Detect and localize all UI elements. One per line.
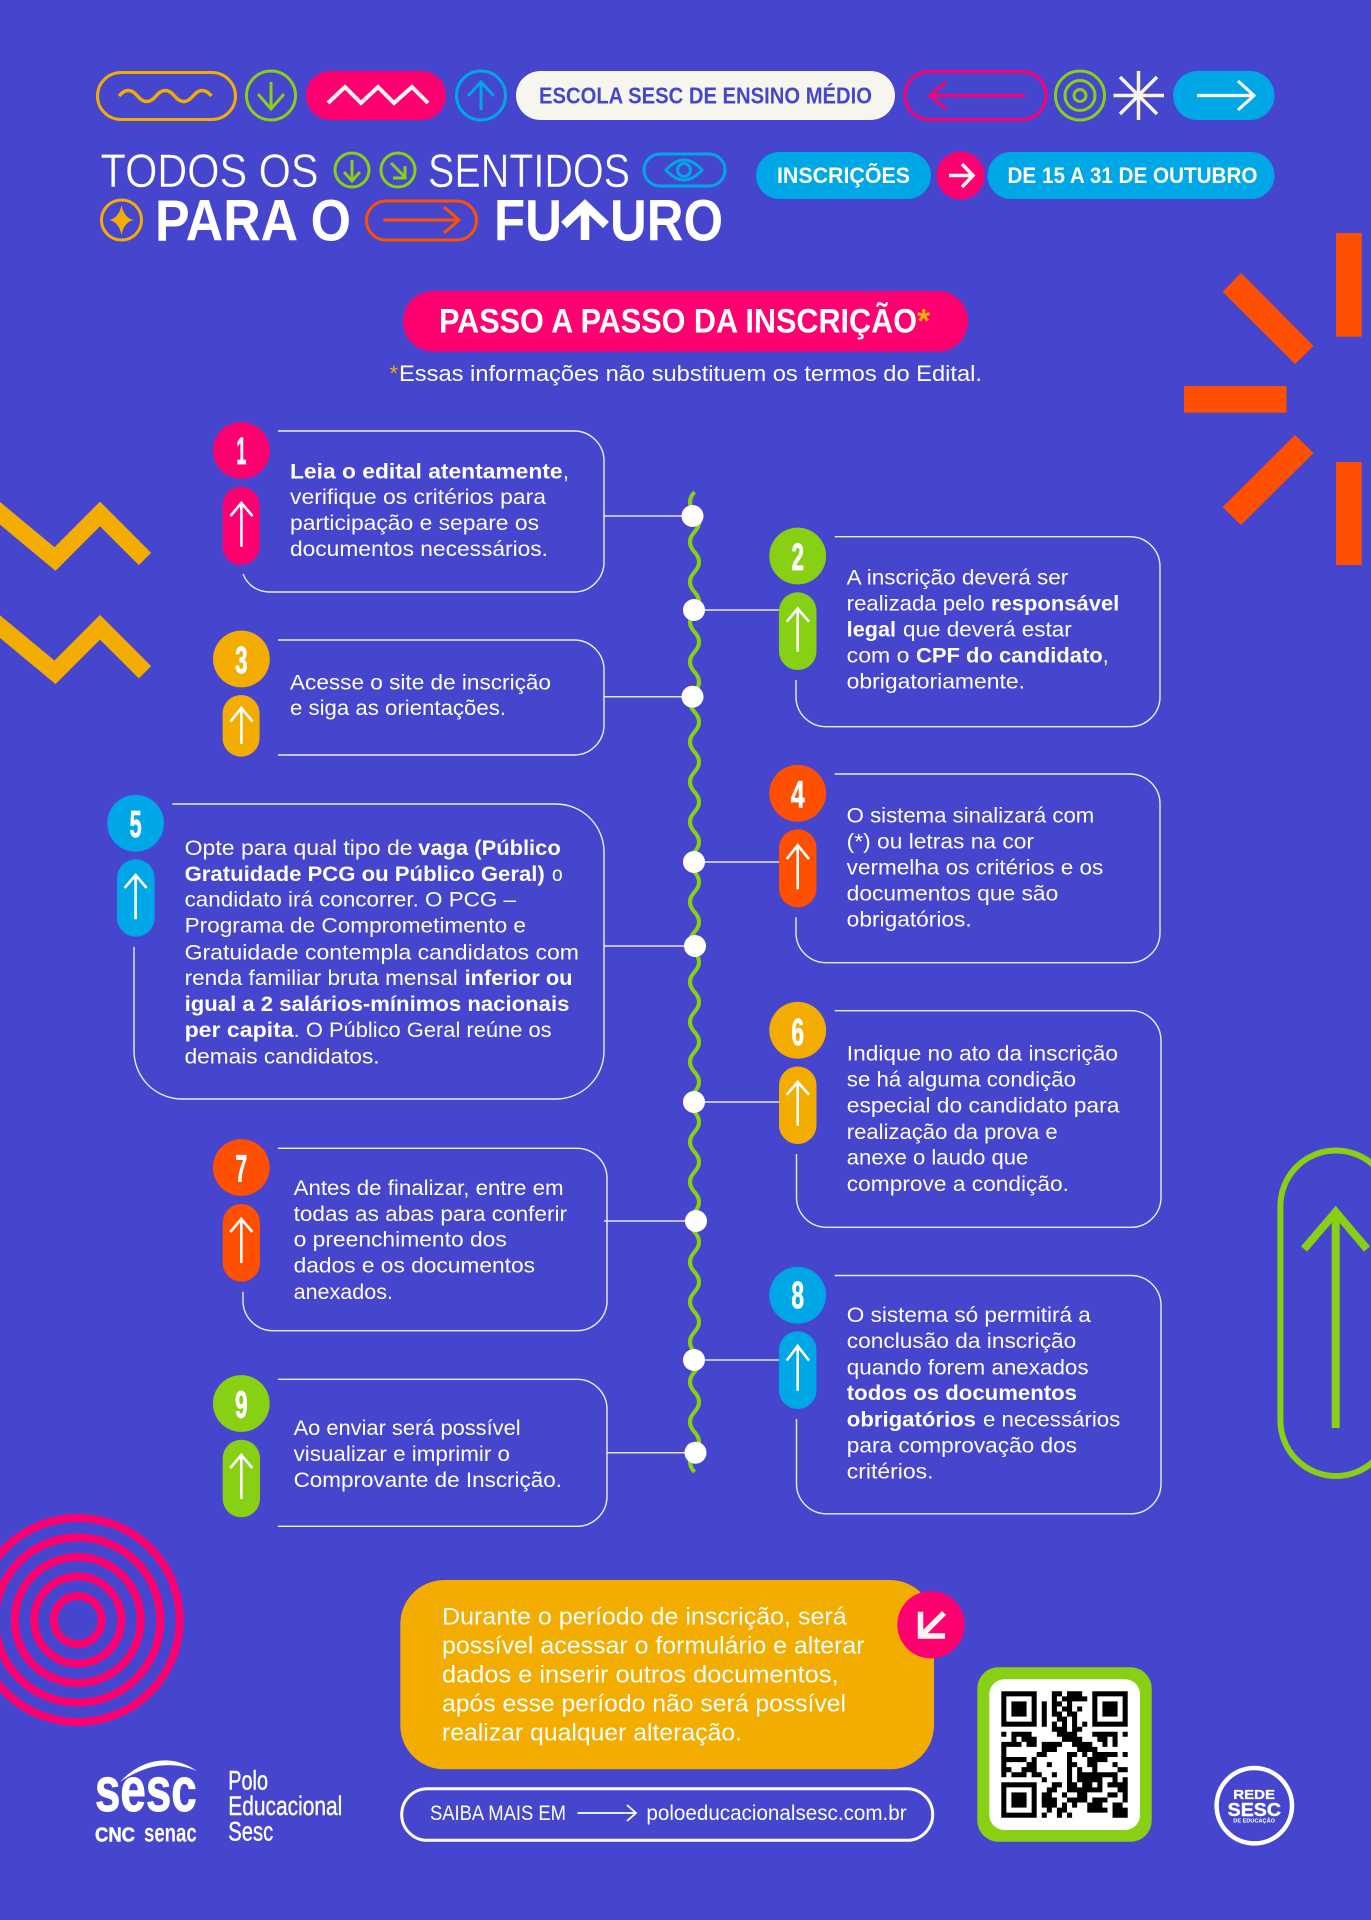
logo: sesc: CNC <box>95 1825 135 1847</box>
panel: step 2: realizada pelo <box>847 592 985 615</box>
icon: pink diagonal arrow <box>897 1591 965 1658</box>
panel: step 6: realização da prova e <box>847 1121 1058 1144</box>
panel: step 2: responsável <box>991 592 1119 615</box>
green wavy line <box>690 492 699 1472</box>
panel: step 8 <box>769 1267 1161 1514</box>
title line 2 <box>102 188 723 254</box>
link pill: saiba mais: SAIBA MAIS EM <box>430 1802 566 1825</box>
icon: pink arrow circle <box>936 152 984 200</box>
panel: step 5: vaga (Público <box>418 837 561 860</box>
logo: sesc: sesc <box>95 1756 197 1825</box>
subtitle note: * <box>390 361 398 386</box>
panel: step 7: 7 <box>235 1149 247 1191</box>
panel: step 5: Opte para qual tipo de <box>185 837 413 860</box>
panel: step 6: comprove a condição. <box>847 1173 1069 1196</box>
logo: polo educacional: Polo <box>228 1765 268 1795</box>
panel: step 1: verifique os critérios para <box>290 486 546 509</box>
panel: step 6: Indique no ato da inscrição <box>847 1042 1118 1065</box>
pill: dates <box>988 152 1274 199</box>
timeline <box>604 492 779 1472</box>
panel: step 9 <box>213 1375 607 1526</box>
icon: green target <box>1056 71 1104 120</box>
icon: pink left arrow pill <box>905 72 1046 120</box>
qr code <box>977 1667 1152 1842</box>
panel: step 3 <box>213 631 604 757</box>
icon: blue right arrow pill <box>1173 71 1274 120</box>
panel: step 2: 2 <box>791 537 804 579</box>
panel: step 5: candidato irá concorrer. O PCG – <box>185 889 516 912</box>
panel: step 4: 4 <box>791 774 805 816</box>
panel: step 2: obrigatoriamente. <box>847 670 1025 693</box>
title line 1 <box>100 144 725 197</box>
icon: pink zigzag pill <box>306 71 446 120</box>
panel: step 3: Acesse o site de inscrição <box>290 671 551 694</box>
panel: step 7: anexados. <box>294 1281 393 1304</box>
title line 1: TODOS OS <box>100 144 318 197</box>
panel: step 6: especial do candidato para <box>847 1095 1120 1118</box>
title line 2: URO <box>610 188 723 254</box>
icon: white asterisk <box>1114 71 1164 120</box>
decoration: pink concentric circles <box>0 1518 180 1722</box>
icon: down arrow circle <box>335 153 369 187</box>
panel: step 7: Antes de finalizar, entre em <box>294 1177 564 1200</box>
panel: step 2: , <box>1103 644 1109 667</box>
panel: step 1: , <box>563 460 569 483</box>
decoration: yellow zigzags <box>0 505 145 672</box>
panel: step 1: Leia o edital atentamente <box>290 460 563 483</box>
icon: green down arrow circle <box>246 71 296 120</box>
panel: step 2: legal <box>847 618 896 641</box>
link pill: saiba mais: poloeducacionalsesc.com.br <box>646 1802 907 1825</box>
panel: step 7: todas as abas para conferir <box>294 1203 567 1226</box>
panel: step 9: visualizar e imprimir o <box>294 1443 510 1466</box>
panel: step 4: (*) ou letras na cor <box>847 831 1034 854</box>
logo: polo educacional: Educacional <box>228 1791 342 1821</box>
panel: step 6: anexe o laudo que <box>847 1147 1028 1170</box>
icon: eye pill <box>644 154 725 186</box>
panel: step 4: obrigatórios. <box>847 909 972 932</box>
panel: step 8: quando forem anexados <box>847 1356 1089 1379</box>
icon: star circle <box>102 200 142 240</box>
logo: sesc: senac <box>144 1818 197 1848</box>
panel: step 1 <box>213 422 604 592</box>
pill: inscricoes: INSCRIÇÕES <box>777 163 910 188</box>
panel: step 9: 9 <box>235 1384 248 1426</box>
panel: step 8: 8 <box>791 1275 804 1317</box>
icon: blue up arrow circle <box>456 71 506 120</box>
panel: step 4: O sistema sinalizará com <box>847 805 1094 828</box>
callout: yellow notice: Durante o período de inscrição, será <box>442 1603 847 1630</box>
logo: polo educacional: Sesc <box>228 1817 273 1847</box>
icon: yellow wave pill <box>98 72 236 120</box>
callout: yellow notice: dados e inserir outros documentos, <box>442 1662 838 1689</box>
decoration: orange sunburst <box>1184 233 1362 565</box>
panel: step 5: renda familiar bruta mensal <box>185 967 458 990</box>
title line 2: PARA O <box>155 188 351 254</box>
panel: step 5: o <box>552 863 563 886</box>
panel: step 2: com o <box>847 644 910 667</box>
panel: step 5: demais candidatos. <box>185 1045 380 1068</box>
panel: step 5: igual a 2 salários-mínimos nacionais <box>185 993 569 1016</box>
title <box>100 144 725 254</box>
panel: step 7: dados e os documentos <box>294 1255 535 1278</box>
label: escola sesc <box>516 71 895 120</box>
panel: step 5: inferior ou <box>465 967 572 990</box>
panel: step 5: Gratuidade PCG ou Público Geral) <box>185 863 545 886</box>
panel: step 6: se há alguma condição <box>847 1068 1076 1091</box>
panel: step 5: per capita <box>185 1019 294 1042</box>
link pill: saiba mais <box>402 1789 933 1840</box>
logo: rede sesc de educacao: DE EDUCAÇÃO <box>1233 1818 1275 1825</box>
callout: yellow notice <box>400 1580 965 1769</box>
panel: step 5: . O Público Geral reúne os <box>294 1019 552 1042</box>
panel: step 1: 1 <box>236 431 246 473</box>
pill: inscricoes <box>756 152 931 199</box>
title line 2: FU <box>494 188 562 254</box>
heading: passo a passo <box>403 291 968 352</box>
top decorative strip <box>98 71 1274 120</box>
panel: step 4: documentos que são <box>847 883 1058 906</box>
panel: step 8: conclusão da inscrição <box>847 1330 1076 1353</box>
icon: diagonal arrow circle <box>381 153 415 187</box>
logo: polo educacional <box>228 1765 342 1847</box>
panel: step 9: Comprovante de Inscrição. <box>294 1469 562 1492</box>
icon: arrow replacing letter T <box>564 205 606 240</box>
panel: step 3: e siga as orientações. <box>290 697 506 720</box>
panel: step 4: vermelha os critérios e os <box>847 857 1103 880</box>
panel: step 8: critérios. <box>847 1460 934 1483</box>
panel: step 6 <box>769 1002 1161 1227</box>
logo: rede sesc de educacao <box>1217 1768 1292 1843</box>
dates banner <box>756 152 1274 200</box>
panel: step 7: o preenchimento dos <box>294 1229 507 1252</box>
title line 1: SENTIDOS <box>428 144 630 197</box>
panel: step 6: 6 <box>791 1012 804 1054</box>
panel: step 5 <box>107 795 604 1099</box>
panel: step 5: Programa de Comprometimento e <box>185 915 526 938</box>
panel: step 7 <box>213 1139 607 1331</box>
logo: sesc <box>95 1756 197 1848</box>
heading: passo a passo: * <box>917 302 931 340</box>
panel: step 2: que deverá estar <box>903 618 1072 641</box>
panel: step 2: A inscrição deverá ser <box>847 566 1068 589</box>
panel: step 5: Gratuidade contempla candidatos com <box>185 941 579 964</box>
panel: step 3: 3 <box>235 640 248 682</box>
panel: step 5: 5 <box>130 804 142 846</box>
callout: yellow notice: após esse período não será possível <box>442 1691 846 1718</box>
label: escola sesc: ESCOLA SESC DE ENSINO MÉDIO <box>539 82 872 108</box>
panel: step 8: O sistema só permitirá a <box>847 1304 1091 1327</box>
panel: step 1: participação e separe os <box>290 512 539 535</box>
connector dots <box>682 505 707 1464</box>
panel: step 9: Ao enviar será possível <box>294 1417 521 1440</box>
heading: passo a passo: PASSO A PASSO DA INSCRIÇÃO <box>439 302 917 340</box>
panel: step 8: para comprovação dos <box>847 1434 1077 1458</box>
logo: rede sesc de educacao: SESC <box>1228 1800 1281 1820</box>
panel: step 8: todos os documentos <box>847 1382 1077 1405</box>
callout: yellow notice: realizar qualquer alteração. <box>442 1720 742 1747</box>
panel: step 1: documentos necessários. <box>290 538 548 561</box>
subtitle note: Essas informações não substituem os termos do Edital. <box>399 361 982 386</box>
panel: step 8: e necessários <box>983 1408 1120 1431</box>
decoration: big green arrow pill <box>1280 1150 1371 1476</box>
panel: step 8: obrigatórios <box>847 1408 976 1431</box>
pill: dates: DE 15 A 31 DE OUTUBRO <box>1008 163 1258 188</box>
panel: step 2: CPF do candidato <box>916 644 1103 667</box>
panel: step 2 <box>769 528 1160 727</box>
icon: orange arrow pill <box>366 201 476 240</box>
logo: rede sesc de educacao: REDE <box>1233 1788 1275 1802</box>
panel: step 4 <box>769 765 1160 963</box>
callout: yellow notice: possível acessar o formulário e alterar <box>442 1633 865 1660</box>
connector lines <box>604 516 779 1453</box>
